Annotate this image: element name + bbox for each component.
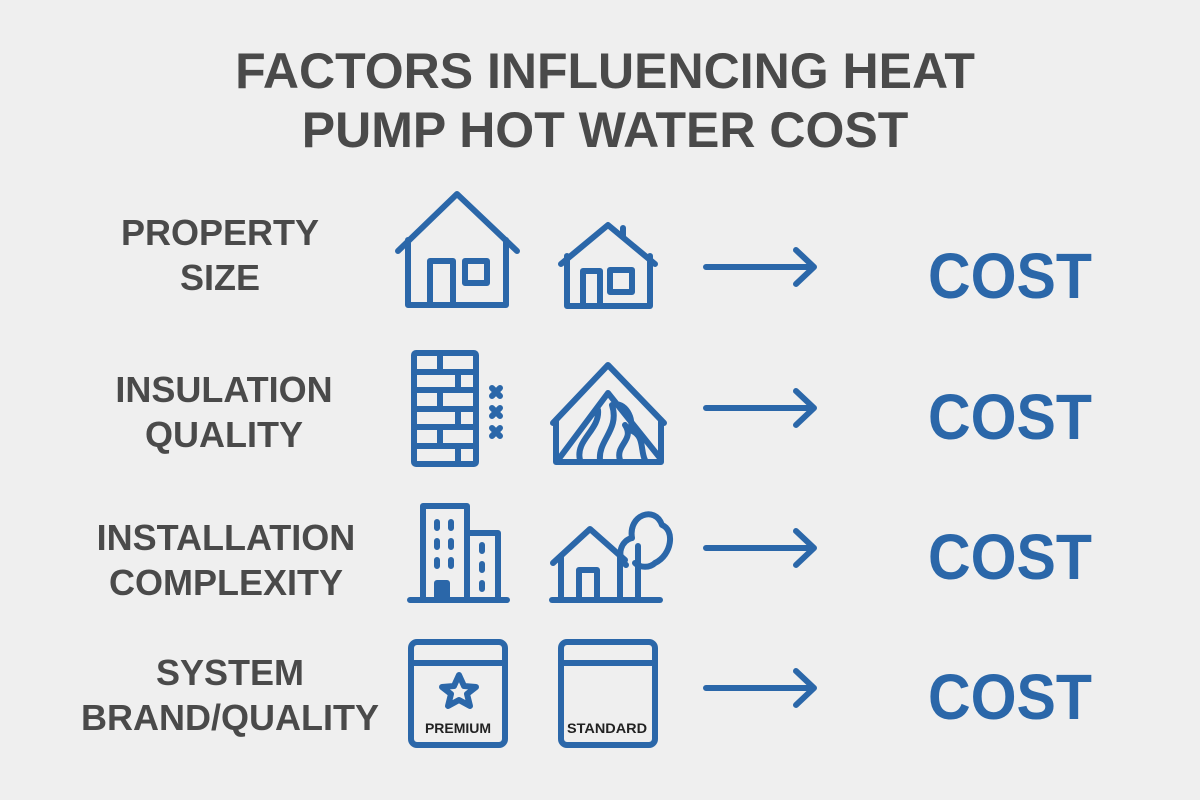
arrow 2 — [706, 391, 814, 425]
icon: standard box — [561, 642, 655, 745]
arrow 1 — [706, 250, 814, 284]
icon: large house — [398, 194, 517, 305]
row label: system brand/quality: BRAND/QUALITY — [81, 697, 379, 738]
icon: house with tree — [552, 514, 670, 600]
row label: insulation quality — [115, 369, 333, 455]
arrow 3 — [706, 531, 814, 565]
row label: insulation quality: QUALITY — [145, 414, 303, 455]
title: PUMP HOT WATER COST — [302, 102, 908, 158]
cost labels — [928, 240, 1092, 733]
row label: insulation quality: INSULATION — [115, 369, 333, 410]
row label: system brand/quality — [81, 652, 379, 738]
row label: property size: SIZE — [180, 257, 260, 298]
cost labels: COST — [928, 661, 1092, 733]
arrow 4 — [706, 671, 814, 705]
icon: standard box: STANDARD — [567, 720, 647, 736]
icon: insulated attic — [553, 365, 664, 462]
icon: premium box: PREMIUM — [425, 720, 491, 736]
icon: apartment building — [410, 506, 507, 600]
row label: property size: PROPERTY — [121, 212, 319, 253]
cost labels: COST — [928, 240, 1092, 312]
title — [235, 43, 975, 158]
row label: installation complexity: COMPLEXITY — [109, 562, 343, 603]
icon: small house — [561, 225, 655, 306]
row label: installation complexity — [97, 517, 355, 603]
title: FACTORS INFLUENCING HEAT — [235, 43, 975, 99]
row label: property size — [121, 212, 319, 298]
cost labels: COST — [928, 521, 1092, 593]
cost labels: COST — [928, 381, 1092, 453]
row label: installation complexity: INSTALLATION — [97, 517, 355, 558]
row label: system brand/quality: SYSTEM — [156, 652, 304, 693]
icon: brick wall — [414, 353, 500, 464]
icon: premium box — [411, 642, 505, 745]
